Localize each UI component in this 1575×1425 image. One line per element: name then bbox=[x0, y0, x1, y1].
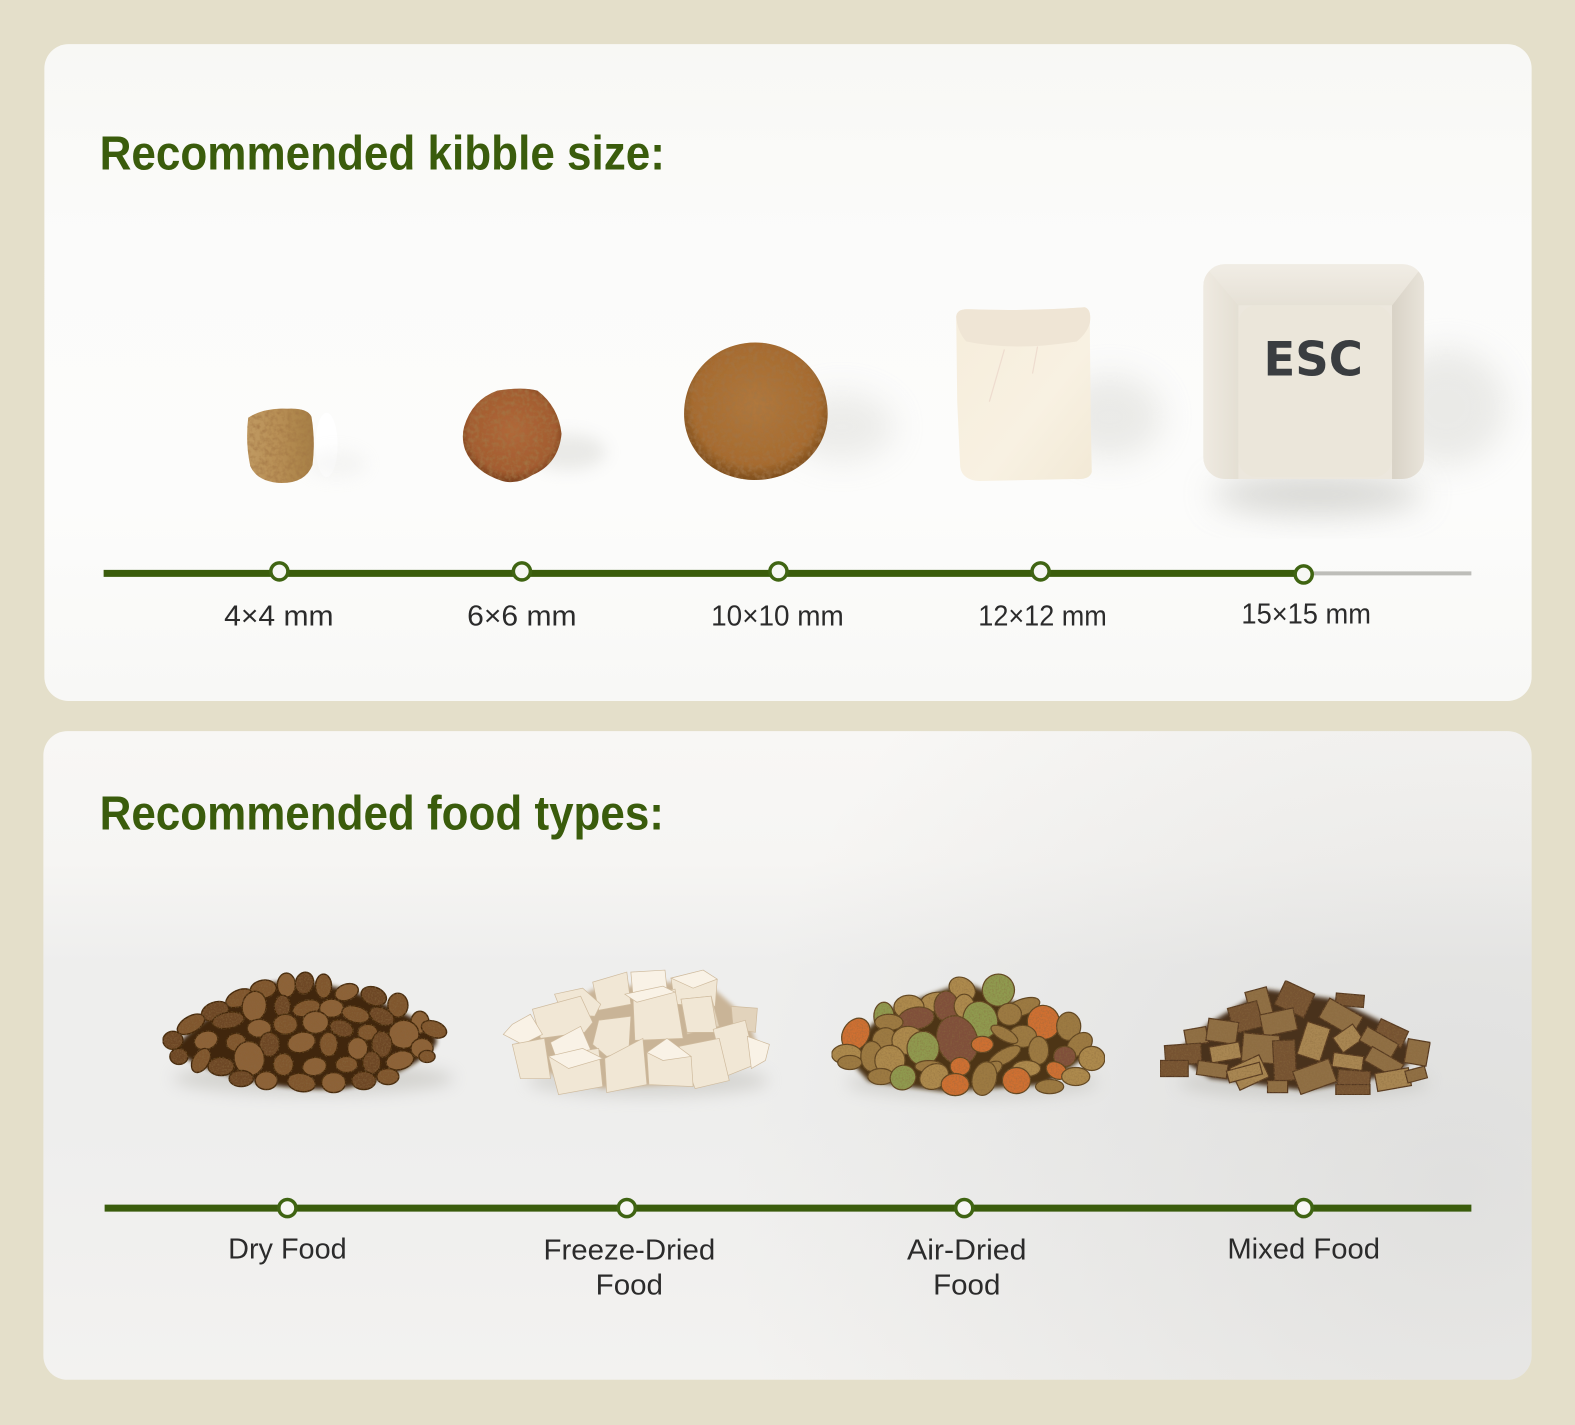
label: 10x10 mm: 10×10 mm bbox=[711, 601, 844, 633]
food pile: mixed food bbox=[1160, 981, 1430, 1098]
food timeline bbox=[105, 1200, 1471, 1217]
label: freeze-dried food bbox=[543, 1234, 715, 1301]
panel: kibble size bbox=[44, 44, 1532, 701]
kibble: 6x6 mm round bbox=[463, 389, 606, 482]
label: 15x15 mm: 15×15 mm bbox=[1241, 599, 1371, 631]
label: freeze-dried food: Food bbox=[596, 1269, 663, 1301]
kibble: 4x4 mm pellet bbox=[247, 409, 367, 483]
kibble: 12x12 mm freeze-dried cube bbox=[956, 307, 1162, 481]
label: 12x12 mm: 12×12 mm bbox=[978, 601, 1107, 633]
heading: recommended kibble size: Recommended kibble size: bbox=[100, 127, 665, 181]
label: air-dried food: Air-Dried bbox=[907, 1234, 1027, 1266]
heading: recommended food types: Recommended food types: bbox=[100, 786, 664, 840]
keycap label: ESC bbox=[1264, 333, 1363, 388]
food pile: dry food bbox=[163, 970, 454, 1095]
label: 4x4 mm: 4×4 mm bbox=[224, 601, 334, 633]
label: 6x6 mm: 6×6 mm bbox=[467, 601, 577, 633]
label: freeze-dried food: Freeze-Dried bbox=[543, 1234, 715, 1266]
label: air-dried food bbox=[907, 1234, 1027, 1301]
food pile: air-dried bbox=[832, 970, 1105, 1098]
label: mixed food: Mixed Food bbox=[1227, 1233, 1380, 1265]
panel: food types bbox=[43, 731, 1532, 1380]
keycap: ESC size reference bbox=[1203, 264, 1507, 514]
food pile: freeze-dried bbox=[503, 970, 769, 1097]
kibble: 10x10 mm round bbox=[684, 342, 894, 480]
size timeline bbox=[104, 563, 1471, 583]
label: air-dried food: Food bbox=[933, 1269, 1000, 1301]
label: dry food: Dry Food bbox=[228, 1233, 347, 1265]
